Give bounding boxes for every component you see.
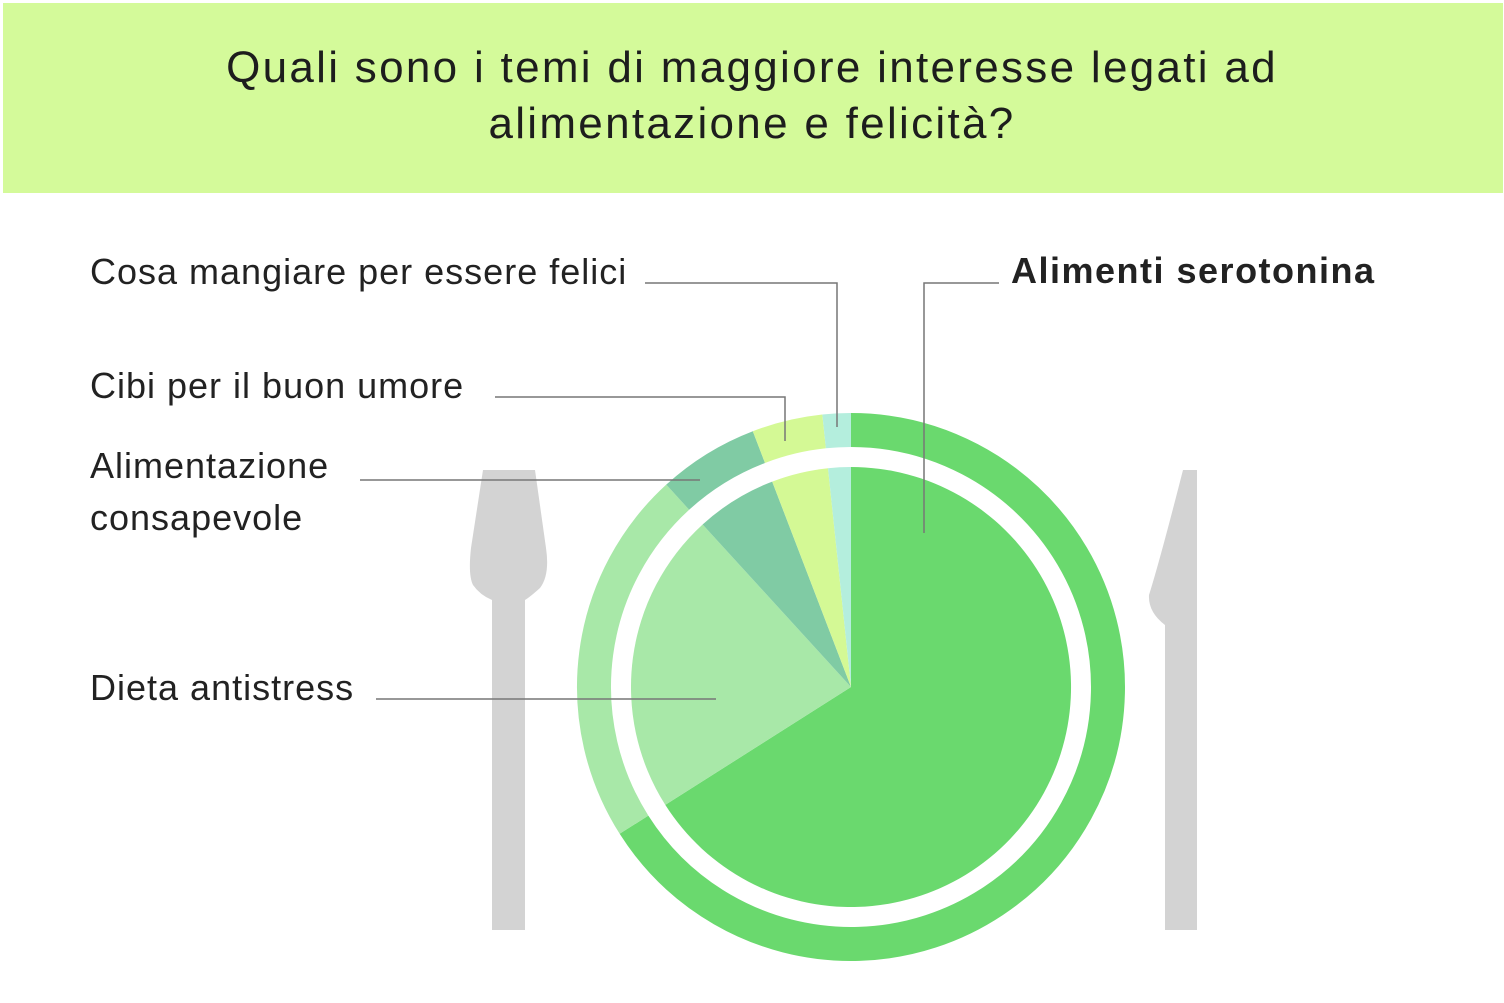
label: Cosa mangiare: Cosa mangiare per essere felici xyxy=(90,251,627,292)
title: alimentazione e felicità? xyxy=(488,99,1016,148)
label: Alimentazione consapevole xyxy=(90,445,329,538)
icon: fork xyxy=(470,470,547,930)
label: Alimenti serotonina: Alimenti serotonina xyxy=(1011,250,1376,291)
label: Alimentazione consapevole: Alimentazione xyxy=(90,445,329,486)
label: Cibi buon umore: Cibi per il buon umore xyxy=(90,365,464,406)
header band xyxy=(3,3,1503,193)
plate outer ring xyxy=(594,430,1108,944)
icon: knife xyxy=(1149,470,1197,930)
label: Dieta antistress: Dieta antistress xyxy=(90,667,354,708)
label: Alimentazione consapevole: consapevole xyxy=(90,497,303,538)
title xyxy=(226,43,1278,148)
title: Quali sono i temi di maggiore interesse legati ad xyxy=(226,43,1278,92)
pie chart xyxy=(631,467,1071,907)
leader lines xyxy=(360,283,999,699)
